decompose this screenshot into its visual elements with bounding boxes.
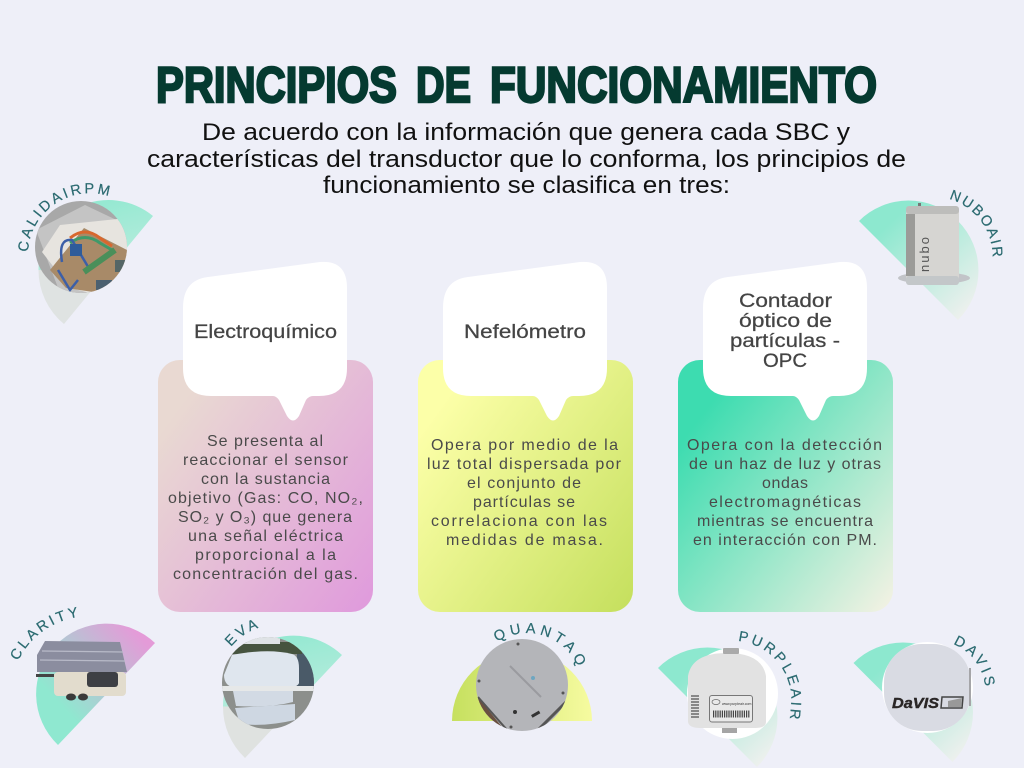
description: Se presenta al xyxy=(207,433,323,450)
sensor: clarity xyxy=(11,606,155,745)
description: correlaciona con las xyxy=(431,513,607,530)
speech bubble xyxy=(183,262,347,420)
title xyxy=(156,57,877,113)
speech bubble xyxy=(443,262,607,420)
panel: contador óptico xyxy=(678,262,893,612)
description: el conjunto de xyxy=(467,475,581,492)
photo xyxy=(35,201,127,293)
description: con la sustancia xyxy=(201,471,330,488)
heading: Electroquímico xyxy=(194,322,337,343)
sector xyxy=(854,642,973,762)
card background xyxy=(158,360,373,612)
panel: electroquímico xyxy=(158,262,373,612)
label: CLARITY xyxy=(11,606,76,659)
sector bottom xyxy=(38,270,108,324)
description: reaccionar el sensor xyxy=(183,452,349,469)
heading: partículas - xyxy=(730,331,840,352)
panel: nefelómetro xyxy=(418,262,633,612)
description: Opera por medio de la xyxy=(431,437,618,454)
sensor: quantaq xyxy=(452,623,592,731)
description: ondas xyxy=(762,475,808,492)
description: SO₂ y O₃) que genera xyxy=(178,509,352,526)
heading: OPC xyxy=(763,351,807,372)
description: electromagnéticas xyxy=(709,494,861,511)
sensor: davis xyxy=(854,635,995,762)
sector xyxy=(658,648,777,767)
sensor: calidairpm xyxy=(18,183,153,324)
sensor: nuboair xyxy=(859,190,1002,320)
description: partículas se xyxy=(473,494,575,511)
description: medidas de masa. xyxy=(446,532,603,549)
description: mientras se encuentra xyxy=(697,513,873,530)
sector top xyxy=(38,200,153,270)
photo xyxy=(687,648,778,739)
sensor: eva xyxy=(222,620,342,758)
device photo xyxy=(898,203,970,285)
description: proporcional a la xyxy=(195,547,336,564)
title: DE xyxy=(416,57,471,113)
description: Opera con la detección xyxy=(687,437,882,454)
sensor: purpleair xyxy=(658,631,802,766)
label: PURPLEAIR xyxy=(739,631,802,719)
description xyxy=(687,437,882,549)
description xyxy=(168,433,363,583)
description: de un haz de luz y otras xyxy=(689,456,881,473)
photo xyxy=(882,642,973,733)
sector xyxy=(452,651,592,721)
photo: www.purpleair.com xyxy=(722,702,751,706)
device photo xyxy=(36,641,127,700)
heading: Nefelómetro xyxy=(464,322,586,343)
label: DAVIS xyxy=(954,635,995,686)
description xyxy=(427,437,622,549)
title: FUNCIONAMIENTO xyxy=(490,57,877,113)
label: CALIDAIRPM xyxy=(18,183,110,251)
intro text: características del transductor que lo conforma, los principios de xyxy=(147,146,906,173)
intro text: De acuerdo con la información que genera cada SBC y xyxy=(202,119,851,146)
device photo: nubo xyxy=(917,237,932,272)
label: NUBOAIR xyxy=(950,190,1002,257)
intro text xyxy=(147,119,906,199)
photo xyxy=(222,637,315,729)
photo xyxy=(476,639,568,732)
title: PRINCIPIOS xyxy=(156,57,397,113)
photo: DaVIS xyxy=(892,695,939,712)
description: en interacción con PM. xyxy=(693,532,877,549)
description: objetivo (Gas: CO, NO₂, xyxy=(168,490,363,507)
label: QUANTAQ xyxy=(494,623,585,666)
sector top xyxy=(223,636,342,706)
label: EVA xyxy=(224,620,259,646)
description: concentración del gas. xyxy=(173,566,358,583)
description: luz total dispersada por xyxy=(427,456,622,473)
sector bottom xyxy=(223,706,294,758)
intro text: funcionamiento se clasifica en tres: xyxy=(323,172,730,199)
card background xyxy=(678,360,893,612)
speech bubble xyxy=(703,262,867,420)
heading: Contador xyxy=(739,291,833,312)
description: una señal eléctrica xyxy=(188,528,343,545)
card background xyxy=(418,360,633,612)
sector xyxy=(859,201,978,320)
sector xyxy=(36,624,155,745)
heading xyxy=(730,291,840,372)
heading: óptico de xyxy=(739,311,832,332)
